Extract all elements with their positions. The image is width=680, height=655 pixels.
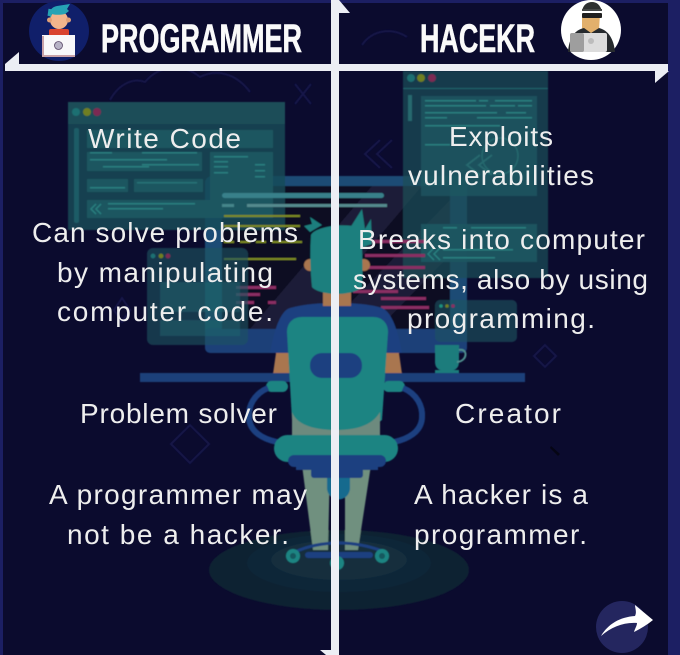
floor glow [209,530,469,610]
text: programmer relation: A programmer may [49,479,307,510]
text: hacker relation [414,479,588,550]
person head and hair [304,209,372,306]
small dark mark [550,446,560,456]
legs [292,412,380,550]
chair base and wheels [286,543,389,570]
text: problem solver: Problem solver [80,398,277,429]
seat [274,435,398,500]
person shoulders and arms [270,303,402,374]
icon: programmer avatar [29,1,89,61]
text: hacker relation: A hacker is a [414,479,588,510]
text: write code: Write Code [88,123,241,154]
text: hacker description: programming. [407,303,595,334]
text: hacker relation: programmer. [414,519,587,550]
monitor [205,176,467,353]
illustration: programmer at desk [68,31,556,610]
text: programmer relation: not be a hacker. [67,519,289,550]
heading: hacker: HACEKR [420,17,535,61]
small code windows [147,248,517,345]
text: exploits vulnerabilities: Exploits [449,121,553,152]
text: programmer description: Can solve problems [32,217,298,248]
chair [249,317,422,442]
text: programmer relation [49,479,307,550]
text: creator: Creator [455,398,561,429]
hacker column text [353,121,648,550]
text: exploits vulnerabilities [408,121,594,191]
text: programmer description: computer code. [57,296,273,327]
icon: hacker avatar [561,0,621,60]
text: hacker description: Breaks into computer [358,224,645,255]
code window: right [403,71,548,278]
text: hacker description: systems, also by using [353,264,648,295]
coffee mug [435,345,466,373]
text: programmer description [32,217,298,327]
code window: left [68,102,285,230]
code lines on screen [222,193,429,309]
icon: next arrow [596,601,653,653]
heading: programmer: PROGRAMMER [101,17,302,61]
faint background icons [110,31,556,463]
text: exploits vulnerabilities: vulnerabilities [408,160,594,191]
programmer column text [32,123,307,550]
desk [140,373,525,382]
text: hacker description [353,224,648,334]
text: programmer description: by manipulating [57,257,273,288]
